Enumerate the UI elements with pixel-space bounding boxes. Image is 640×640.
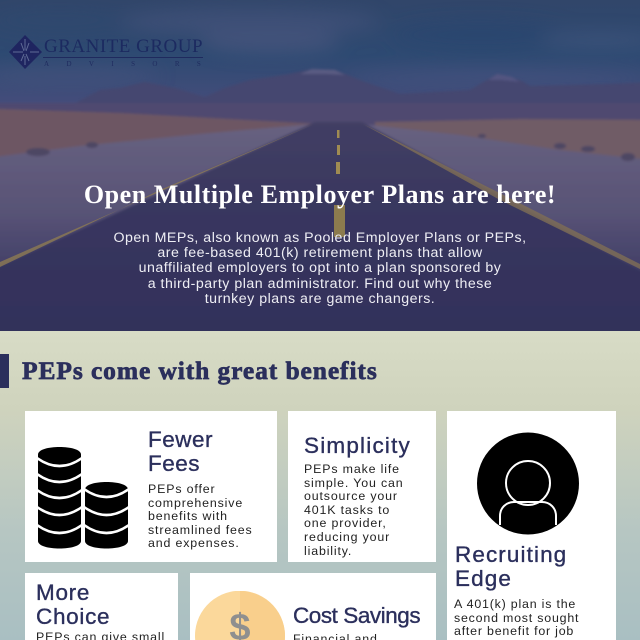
card: more choice — [25, 573, 178, 640]
logo — [9, 35, 218, 69]
card text: streamlined fees — [148, 523, 253, 537]
gravel shoulders — [0, 123, 325, 285]
hero description: turnkey plans are game changers. — [205, 291, 435, 307]
card: cost savings — [190, 573, 436, 640]
card text: and expenses. — [148, 536, 240, 550]
card heading — [148, 427, 213, 476]
card: recruiting edge — [447, 411, 616, 640]
card heading: Fewer — [148, 427, 213, 452]
card text — [304, 463, 404, 558]
card heading: Choice — [36, 604, 110, 629]
card heading: Edge — [455, 566, 512, 591]
card heading — [455, 542, 567, 591]
card text: reducing your — [304, 530, 390, 544]
hero description: Open MEPs, also known as Pooled Employer Plans or PEPs, — [113, 230, 527, 246]
card heading: Cost Savings — [293, 603, 420, 628]
card heading: More — [36, 580, 90, 605]
mountains — [70, 69, 640, 118]
hero description — [113, 230, 527, 307]
scrub fields — [0, 108, 320, 160]
card text: after benefit for job — [454, 624, 574, 638]
road — [0, 122, 640, 360]
card text: simple. You can — [304, 476, 404, 490]
card text: comprehensive — [148, 496, 243, 510]
road lines — [0, 124, 314, 267]
benefits section — [0, 331, 640, 640]
card: simplicity — [288, 411, 436, 562]
hero description: unaffiliated employers to opt into a plan sponsored by — [139, 260, 501, 276]
card text — [148, 483, 253, 550]
card text: liability. — [304, 544, 352, 558]
icon: person in circle — [477, 432, 579, 534]
hero title: Open Multiple Employer Plans are here! — [84, 180, 556, 209]
card text: outsource your — [304, 489, 398, 503]
card heading — [36, 580, 110, 629]
card text: second most sought — [454, 611, 579, 625]
icon: diamond logo mark — [9, 35, 42, 69]
card heading: Simplicity — [304, 433, 411, 458]
icon: coin stacks — [38, 447, 128, 548]
card text: one provider, — [304, 516, 387, 530]
logo wordmark: GRANITE GROUP — [44, 36, 203, 57]
section heading: PEPs come with great benefits — [22, 356, 378, 385]
section accent bar — [0, 354, 9, 388]
card heading: Fees — [148, 451, 200, 476]
hero banner: desert road photo with overlay — [0, 0, 640, 331]
logo tagline: ADVISORS — [44, 60, 218, 68]
card text — [454, 598, 579, 638]
card text: 401K tasks to — [304, 503, 390, 517]
card: fewer fees — [25, 411, 277, 562]
icon: dollar coin — [195, 591, 285, 640]
hero description: are fee-based 401(k) retirement plans that allow — [157, 245, 483, 261]
card heading: Recruiting — [455, 542, 567, 567]
card text: benefits with — [148, 509, 228, 523]
hero description: a third-party plan administrator. Find out why these — [148, 276, 492, 292]
